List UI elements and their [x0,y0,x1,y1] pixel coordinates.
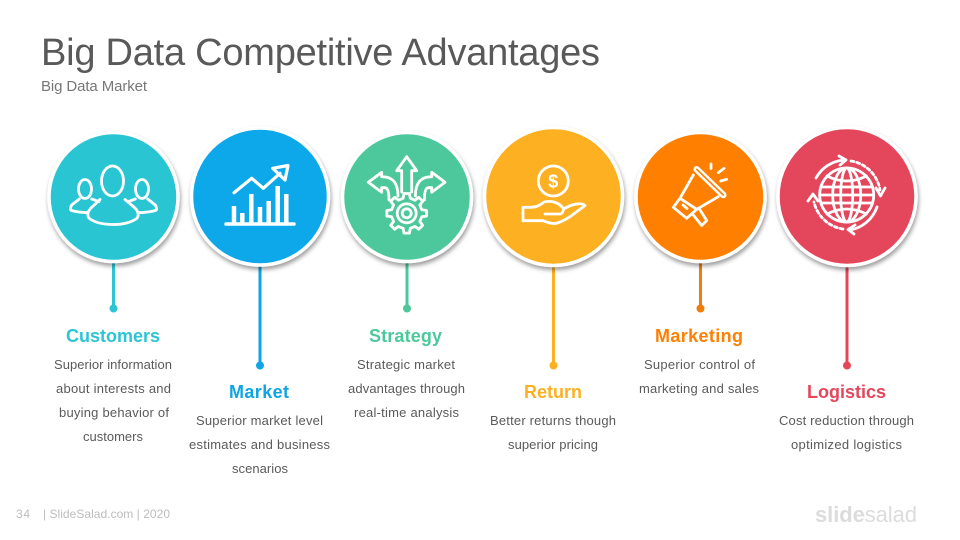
text: strategy [348,357,465,420]
panel: market [189,128,330,476]
connector: customers [110,262,118,312]
footer: source: | SlideSalad.com | 2020 [43,507,170,521]
icon: globe with arrows [808,156,885,234]
icon: people [70,166,157,224]
panel: return [484,128,622,452]
text: logistics [779,413,914,452]
text: strategy: real-time analysis [354,405,460,420]
connector: return [550,262,558,370]
heading: logistics: Logistics [807,382,886,402]
text: market: Superior market level [196,413,323,428]
heading: strategy: Strategy [369,326,442,346]
connector: strategy [403,262,411,312]
circle: customers [49,132,178,262]
heading: return: Return [524,382,582,402]
circle: market [192,128,328,265]
text: customers: Superior information [54,357,172,372]
panel: marketing [636,132,765,396]
icon: megaphone [673,164,727,226]
heading: marketing: Marketing [655,326,743,346]
text: marketing: Superior control of [644,357,755,372]
connector: market [256,262,264,370]
icon: growth chart [226,166,294,224]
footer: page number: 34 [16,507,30,521]
icon: hand with coin: $ [548,172,558,192]
text: customers: customers [83,429,144,444]
heading: market: Market [229,382,289,402]
panel: strategy [342,132,472,420]
text: return: superior pricing [508,437,598,452]
text: strategy: advantages through [348,381,465,396]
text: logistics: optimized logistics [791,437,902,452]
icon: gear with arrows [368,157,445,233]
text: market [189,413,330,476]
text: logistics: Cost reduction through [779,413,914,428]
circle: marketing [636,132,765,262]
text: return: Better returns though [490,413,616,428]
text: customers [54,357,172,444]
text: customers: about interests and [56,381,171,396]
heading: customers: Customers [66,326,160,346]
panel: customers [49,132,178,444]
icon: hand with coin [523,166,585,224]
logo: slidesalad: slidesalad [815,502,917,527]
text: return [490,413,616,452]
text: marketing [639,357,760,396]
connector: marketing [696,262,704,312]
text: market: scenarios [232,461,288,476]
connector: logistics [843,262,851,370]
text: strategy: Strategic market [357,357,455,372]
circle: return [484,128,622,266]
subtitle: Big Data Market [41,78,148,95]
text: customers: buying behavior of [59,405,169,420]
panel: logistics [778,128,916,452]
circle: logistics [778,128,916,266]
circle: strategy [342,132,472,262]
text: market: estimates and business [189,437,330,452]
text: marketing: marketing and sales [639,381,760,396]
title: Big Data Competitive Advantages [41,32,600,74]
